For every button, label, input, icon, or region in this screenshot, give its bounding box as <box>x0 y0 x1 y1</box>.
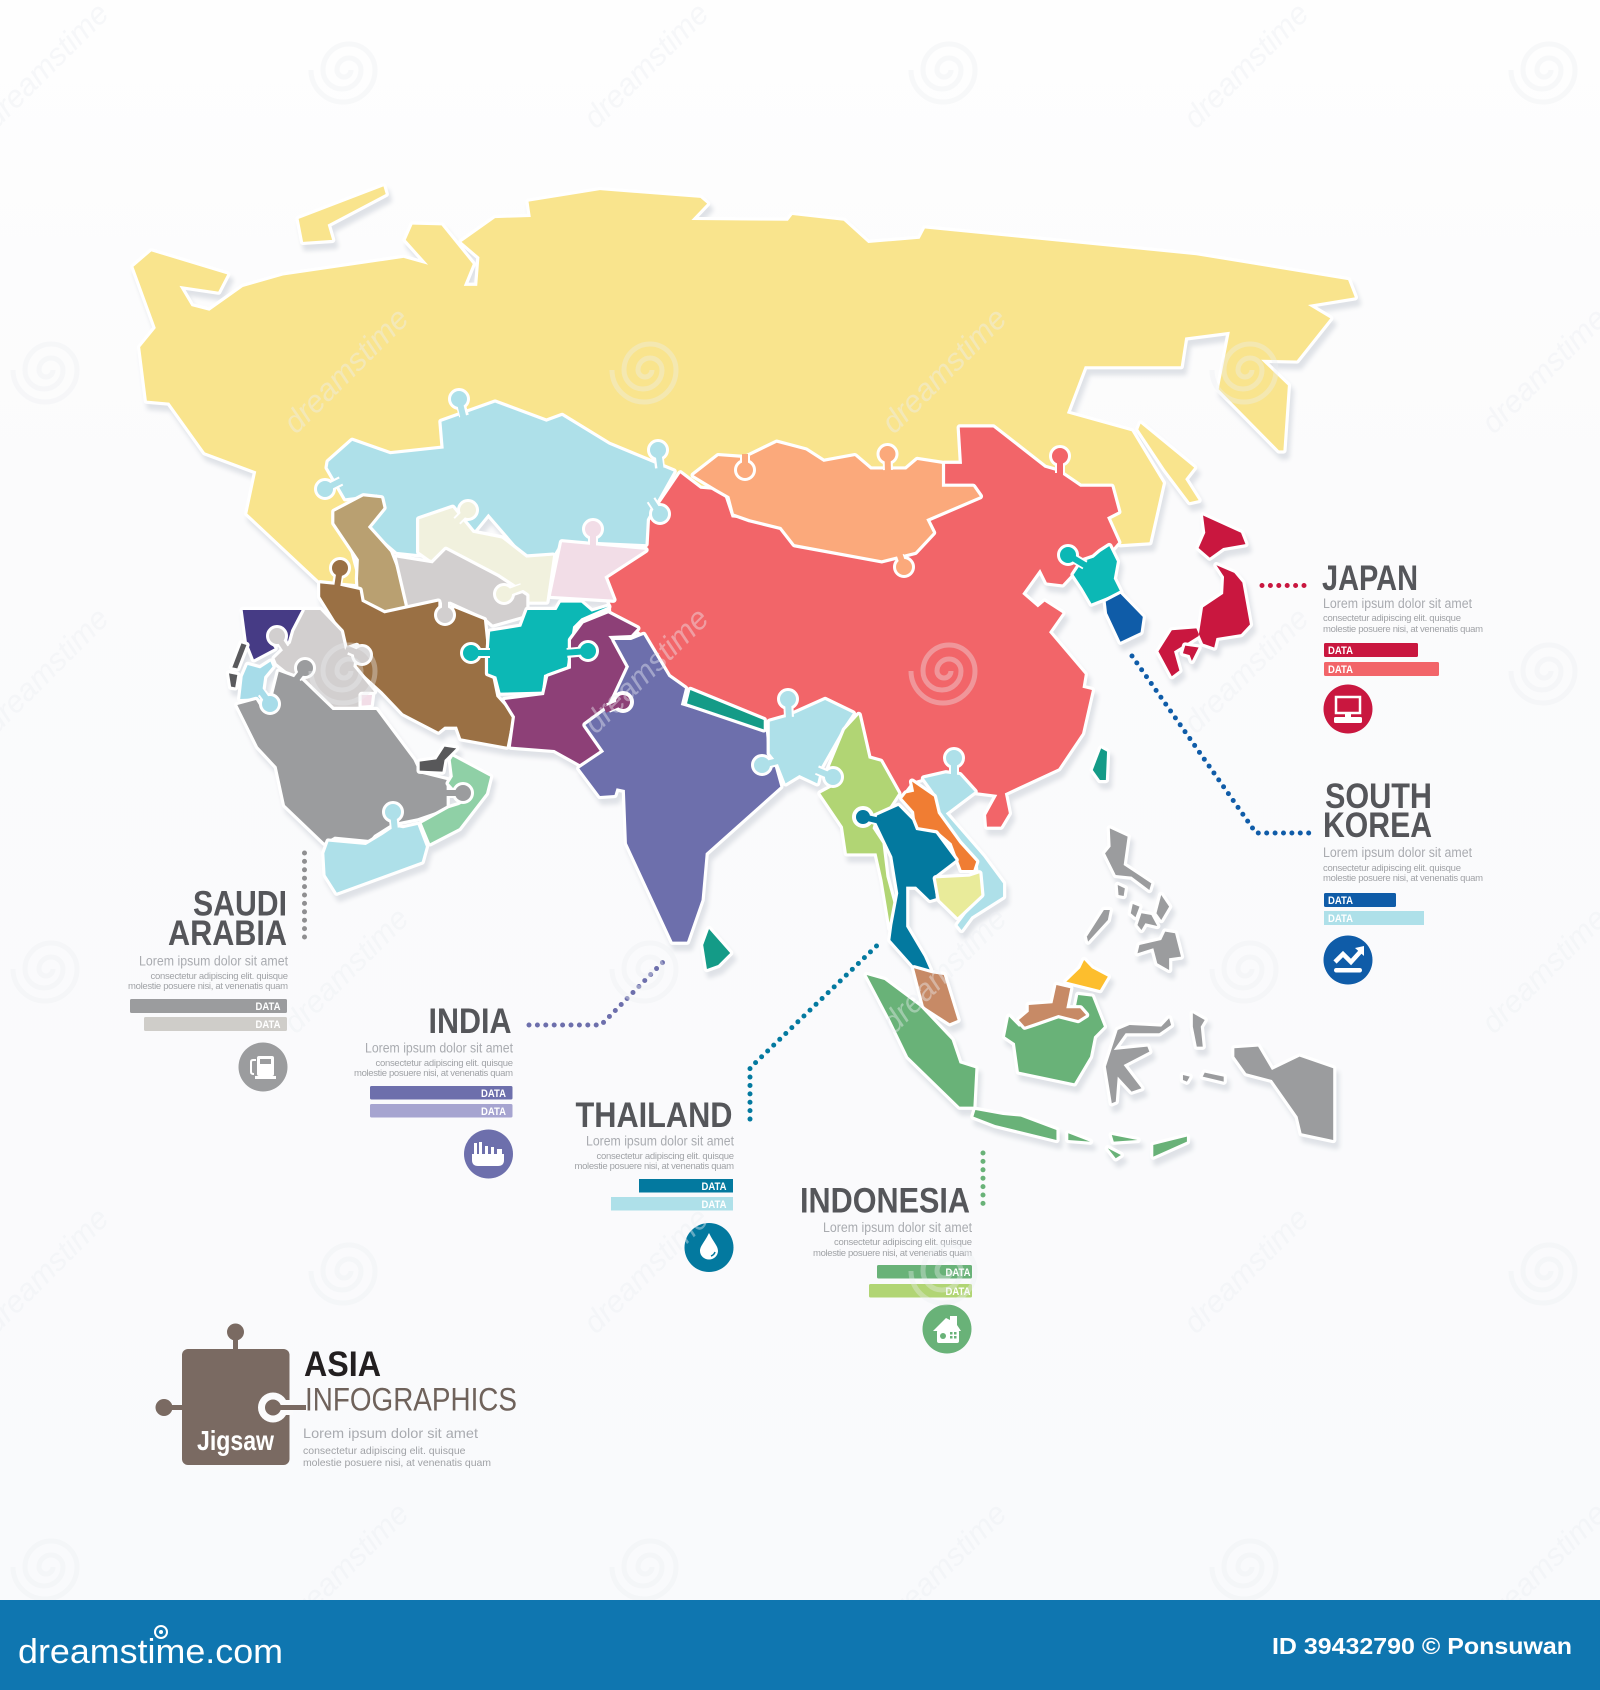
Syria <box>243 610 302 659</box>
data bars: Thailand: DATA <box>702 1181 727 1193</box>
watermark: dreamstime <box>874 301 1013 440</box>
heading: Saudi Arabia: SAUDI <box>193 884 287 924</box>
Jordan <box>240 662 273 700</box>
Malaysia Borneo <box>1019 985 1086 1027</box>
Tajikistan <box>397 550 526 625</box>
logo label: Jigsaw <box>197 1425 274 1456</box>
Kuwait <box>362 695 372 706</box>
Java <box>973 1110 1056 1140</box>
title <box>303 1345 517 1469</box>
south-west countries <box>229 583 780 969</box>
Mindanao <box>1137 932 1181 970</box>
Papua <box>1234 1047 1333 1140</box>
text: Thailand: Lorem ipsum dolor sit amet <box>586 1134 734 1148</box>
text: Indonesia: Lorem ipsum dolor sit amet <box>823 1220 972 1235</box>
heading: South Korea: KOREA <box>1323 806 1432 845</box>
data bars: Japan: DATA <box>1328 645 1353 657</box>
Taiwan <box>1093 748 1107 780</box>
callout: India <box>354 1002 513 1178</box>
data bars: Indonesia: DATA <box>946 1267 971 1279</box>
Oman <box>422 757 490 843</box>
text: Saudi Arabia: consectetur adipiscing elit. quisque <box>150 971 288 982</box>
jigsaw knobs <box>260 391 1088 831</box>
data bars: India: DATA <box>481 1088 506 1100</box>
watermark: dreamstime <box>276 901 415 1040</box>
title description: Lorem ipsum dolor sit amet <box>303 1425 478 1441</box>
Sakhalin <box>1138 424 1199 502</box>
Sulawesi <box>1106 1018 1171 1103</box>
watermark: dreamstime <box>874 901 1013 1040</box>
Brunei <box>1066 960 1108 990</box>
watermark: dreamstime <box>276 301 415 440</box>
watermark: dreamstime <box>276 1496 415 1635</box>
Israel <box>229 673 237 687</box>
leader: Thailand <box>750 946 876 1127</box>
Kazakhstan <box>328 403 674 558</box>
heading: Saudi Arabia <box>168 884 287 953</box>
Buru <box>1183 1075 1190 1082</box>
Vietnam <box>924 773 1003 930</box>
icon: computer <box>1324 684 1372 734</box>
Lesser Sunda <box>1112 1135 1137 1142</box>
text: Saudi Arabia <box>128 954 288 992</box>
title description: consectetur adipiscing elit. quisque <box>303 1445 466 1457</box>
title: Infographics: INFOGRAPHICS <box>305 1382 517 1418</box>
Palawan <box>1087 910 1110 942</box>
leader: India <box>529 961 664 1025</box>
Halmahera <box>1193 1013 1205 1047</box>
callout: Saudi Arabia <box>128 884 288 1092</box>
watermark: dreamstime <box>576 601 715 740</box>
Borneo <box>1005 995 1104 1083</box>
callout: South Korea <box>1323 777 1483 984</box>
map of Asia <box>133 186 1355 1158</box>
text: India: Lorem ipsum dolor sit amet <box>365 1040 513 1056</box>
Bangladesh <box>770 700 853 783</box>
text: South Korea: consectetur adipiscing elit. quisque <box>1323 863 1461 874</box>
footer credit: ID 39432790 © Ponsuwan <box>1272 1633 1572 1659</box>
Cebu <box>1137 913 1157 930</box>
text: Japan <box>1323 596 1483 635</box>
text: South Korea: molestie posuere nisi, at venenatis quam <box>1323 873 1483 884</box>
text: India: consectetur adipiscing elit. quisque <box>376 1058 513 1069</box>
Yemen <box>324 825 426 893</box>
south-east countries <box>770 700 1333 1158</box>
leader: Saudi Arabia <box>302 853 307 942</box>
Samar <box>1156 895 1169 920</box>
text: South Korea: Lorem ipsum dolor sit amet <box>1323 845 1472 860</box>
heading: Japan: JAPAN <box>1322 559 1418 598</box>
footer band <box>0 1600 1600 1690</box>
heading: Indonesia: INDONESIA <box>800 1182 970 1220</box>
text: Thailand <box>574 1134 734 1172</box>
text: Saudi Arabia: Lorem ipsum dolor sit amet <box>139 954 288 968</box>
United Arab Emirates <box>420 747 456 772</box>
title description: molestie posuere nisi, at venenatis quam <box>303 1457 491 1469</box>
data bars: India <box>370 1086 512 1118</box>
Japan: Shikoku <box>1183 646 1199 661</box>
heading: Thailand: THAILAND <box>576 1096 732 1135</box>
heading: South Korea: SOUTH <box>1325 777 1432 816</box>
data bars: Thailand: DATA <box>702 1199 727 1211</box>
India <box>579 635 780 942</box>
data bars: South Korea: DATA <box>1328 913 1353 925</box>
leader: Japan <box>1262 583 1312 588</box>
Sri Lanka <box>703 929 730 969</box>
heading: South Korea <box>1323 777 1432 845</box>
data bars: Saudi Arabia: DATA <box>256 1001 281 1013</box>
data bars: Indonesia: DATA <box>946 1286 971 1298</box>
Iraq <box>275 610 374 710</box>
text: India: molestie posuere nisi, at venenatis quam <box>354 1068 513 1079</box>
northern countries <box>133 186 1355 827</box>
heading: India: INDIA <box>428 1002 512 1041</box>
Russia <box>133 190 1355 584</box>
data bars: Japan: DATA <box>1328 664 1353 676</box>
Seram <box>1203 1073 1224 1082</box>
Nepal <box>687 690 764 729</box>
leader: South Korea <box>1132 656 1314 833</box>
data bars: Japan <box>1324 643 1439 676</box>
leader: Indonesia <box>980 1153 986 1210</box>
Malaysia peninsula <box>914 968 958 1023</box>
data bars: Saudi Arabia: DATA <box>256 1019 281 1031</box>
Uzbekistan <box>419 508 553 602</box>
text: Japan: Lorem ipsum dolor sit amet <box>1323 596 1472 611</box>
text: Thailand: consectetur adipiscing elit. quisque <box>596 1151 734 1162</box>
data bars: India: DATA <box>481 1106 506 1118</box>
Turkmenistan <box>334 496 408 615</box>
Philippine island <box>1118 885 1125 896</box>
callout: Japan <box>1322 559 1483 734</box>
Laos <box>902 782 976 870</box>
text: Japan: consectetur adipiscing elit. quisque <box>1323 613 1461 624</box>
Kyrgyzstan <box>551 542 646 600</box>
text: South Korea <box>1323 845 1483 884</box>
callout: Indonesia <box>800 1182 972 1354</box>
North Korea <box>1074 546 1120 603</box>
Lebanon <box>232 643 246 668</box>
callout: Thailand <box>574 1096 734 1272</box>
Luzon <box>1105 828 1151 890</box>
data bars: South Korea <box>1324 893 1424 925</box>
data bars: Indonesia <box>869 1265 972 1298</box>
Iran <box>320 583 513 747</box>
text: Japan: molestie posuere nisi, at venenatis quam <box>1323 624 1483 635</box>
Myanmar <box>820 715 898 928</box>
Saudi Arabia <box>237 672 447 843</box>
icon: water drop <box>684 1223 734 1272</box>
Cambodia <box>936 873 981 917</box>
watermark: dreamstime <box>576 1201 715 1340</box>
icon: fuel pump <box>238 1042 288 1092</box>
Panay <box>1131 904 1139 917</box>
Mongolia <box>694 443 980 560</box>
title description <box>303 1425 491 1469</box>
Novaya Zemlya <box>299 186 386 242</box>
watermark: dreamstime <box>1176 1201 1315 1340</box>
text: Indonesia: molestie posuere nisi, at venenatis quam <box>813 1248 972 1259</box>
South Korea <box>1106 594 1143 642</box>
Pakistan <box>505 613 637 765</box>
heading: Saudi Arabia: ARABIA <box>168 914 287 953</box>
Sumba <box>1108 1148 1121 1158</box>
icon: house <box>922 1304 972 1354</box>
Afghanistan <box>488 603 608 693</box>
text: India <box>354 1040 513 1079</box>
Japan: Honshu <box>1158 565 1250 676</box>
title: Asia: ASIA <box>304 1345 381 1384</box>
text: Indonesia: consectetur adipiscing elit. quisque <box>834 1237 972 1248</box>
watermark: dreamstime <box>1176 601 1315 740</box>
text: Saudi Arabia: molestie posuere nisi, at venenatis quam <box>128 981 288 992</box>
data bars: Saudi Arabia <box>130 999 287 1031</box>
icon: chart <box>1324 936 1372 984</box>
text: Thailand: molestie posuere nisi, at venenatis quam <box>574 1161 734 1172</box>
watermark: dreamstime <box>874 1496 1013 1635</box>
Timor <box>1153 1137 1187 1157</box>
Japan: Hokkaido <box>1199 515 1245 558</box>
icon: factory <box>464 1130 513 1178</box>
data bars: South Korea: DATA <box>1328 895 1353 907</box>
China <box>602 427 1118 827</box>
footer logo: dreamstime.com <box>18 1633 283 1671</box>
Sumatra <box>867 975 975 1107</box>
data bars: Thailand <box>611 1179 733 1211</box>
logo: jigsaw piece <box>156 1324 306 1465</box>
Bali <box>1068 1133 1090 1142</box>
Thailand <box>875 806 956 970</box>
text: Indonesia <box>813 1220 972 1259</box>
